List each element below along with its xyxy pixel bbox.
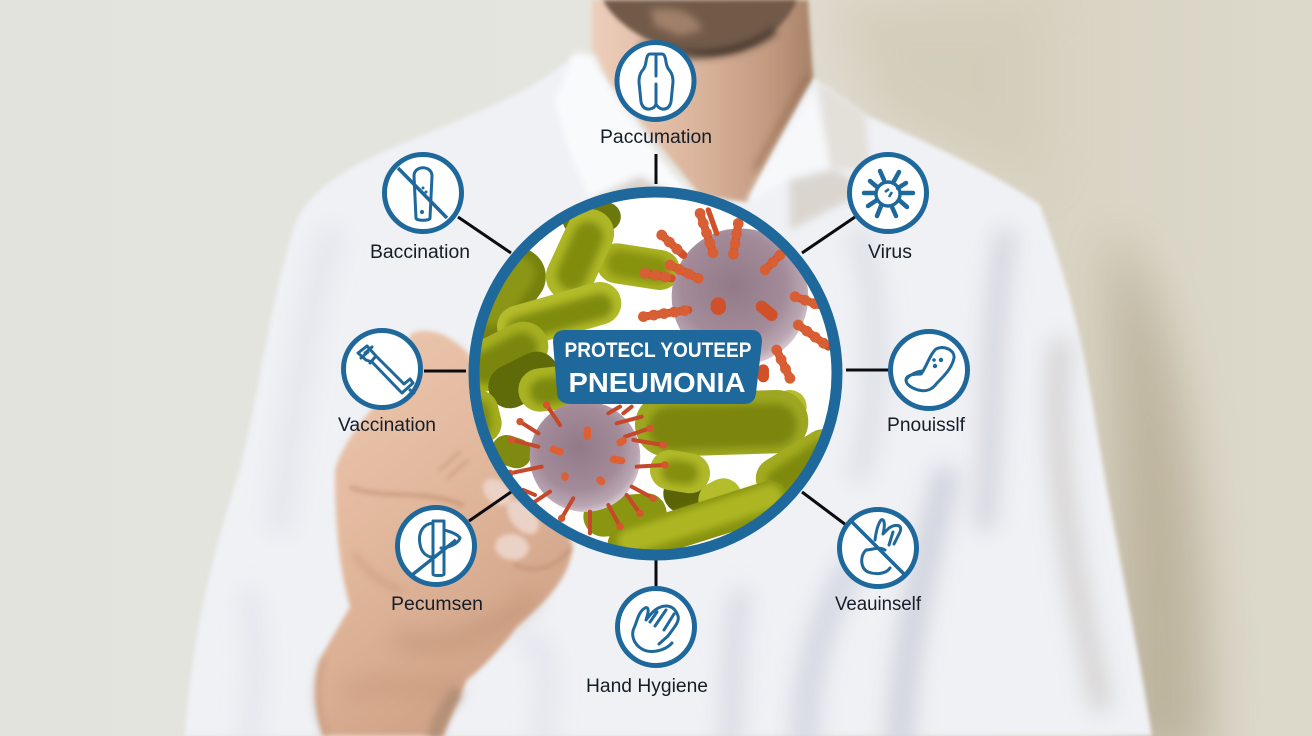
icon: open hand xyxy=(618,588,694,666)
item: Virus xyxy=(850,154,926,263)
central circular illustration xyxy=(470,190,842,562)
icon: prohibited tube and capsule xyxy=(398,508,474,584)
item: Paccumation: Paccumation xyxy=(600,127,712,148)
item: Baccination: Baccination xyxy=(370,242,470,263)
icon: prohibited hand xyxy=(840,510,916,586)
icon: syringe xyxy=(344,330,420,408)
title banner: PROTECL YOUTEEP xyxy=(564,339,752,362)
green bacteria rods xyxy=(478,217,823,545)
large virus xyxy=(643,210,828,378)
item: Pecumsen: Pecumsen xyxy=(391,594,483,615)
item: Virus: Virus xyxy=(868,242,912,263)
icon: virus xyxy=(850,154,926,232)
fingernails xyxy=(478,473,545,562)
title banner xyxy=(553,330,762,404)
shirt collar xyxy=(555,52,870,230)
small virus xyxy=(510,401,665,533)
icon: prohibited vial xyxy=(384,154,462,232)
item: Hand Hygiene xyxy=(586,588,708,697)
item: Vaccination xyxy=(338,330,436,436)
connector lines xyxy=(424,154,889,586)
item: Paccumation xyxy=(600,42,712,148)
item: Veauinself: Veauinself xyxy=(835,594,922,615)
item: Pecumsen xyxy=(391,508,483,615)
folds xyxy=(250,240,1100,736)
item: Pnouisslf: Pnouisslf xyxy=(887,415,966,436)
item: Baccination xyxy=(370,154,470,263)
item: Hand Hygiene: Hand Hygiene xyxy=(586,676,708,697)
item: Pnouisslf xyxy=(887,332,968,436)
man's white shirt xyxy=(185,55,1152,736)
icon: lungs shape xyxy=(617,42,694,120)
item: Vaccination: Vaccination xyxy=(338,415,436,436)
item: Veauinself xyxy=(835,510,922,615)
title banner: PNEUMONIA xyxy=(568,367,746,398)
illustration: bacteria and viruses xyxy=(480,203,830,550)
creases xyxy=(316,452,570,736)
blue ring xyxy=(474,192,837,555)
man's neck and beard xyxy=(592,0,813,202)
writing hand xyxy=(315,331,573,736)
icon: bacterium xyxy=(890,332,968,408)
